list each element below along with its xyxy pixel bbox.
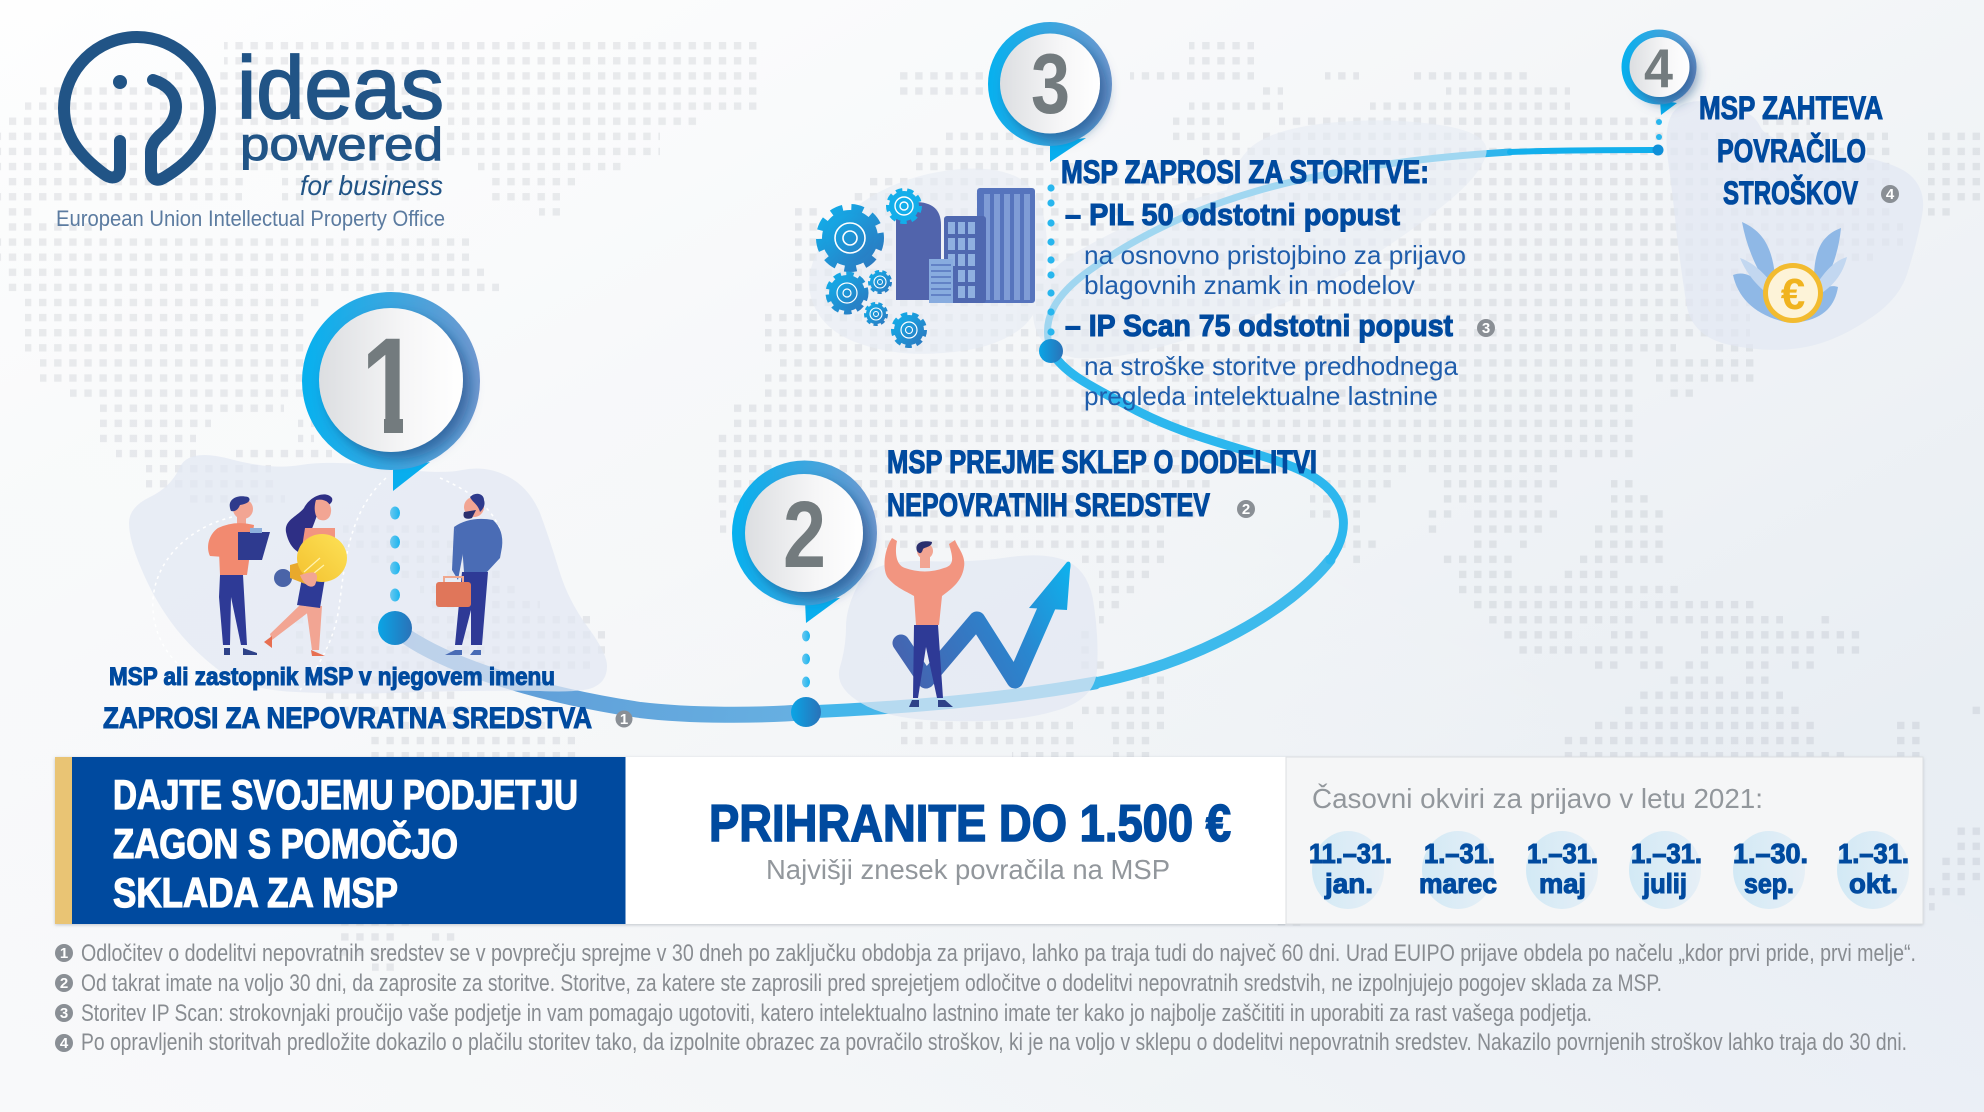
PIL discount: – PIL 50 odstotni popust	[1065, 197, 1400, 232]
logo word: for business: for business	[300, 170, 443, 201]
growth arrow	[901, 562, 1071, 680]
footnote marker 1: 1	[620, 711, 628, 728]
IP Scan discount: – IP Scan 75 odstotni popust	[1065, 308, 1453, 343]
window: September: 1.–30.	[1733, 838, 1808, 869]
step 1 subheading: MSP ali zastopnik MSP v njegovem imenu	[109, 663, 555, 691]
icon: euro coin with leaves: €	[1781, 270, 1805, 319]
footnote marker 3	[1477, 319, 1495, 337]
step 3 heading: MSP ZAPROSI ZA STORITVE:	[1061, 154, 1429, 190]
window: September	[1733, 831, 1808, 909]
figure: woman with light bulb	[264, 494, 347, 656]
window: January: 11.–31.	[1309, 838, 1392, 869]
pin 4 connector dots	[1652, 119, 1664, 156]
panel: savings	[709, 795, 1231, 885]
figure: cheering man with growth arrow	[885, 538, 1071, 707]
IP Scan detail line 2: pregleda intelektualne lastnine	[1084, 381, 1438, 411]
window: March: marec	[1419, 868, 1497, 899]
step 4 text	[1699, 90, 1899, 211]
panel: slogan	[72, 757, 626, 924]
window: March: 1.–31.	[1424, 838, 1495, 869]
journey path	[395, 150, 1658, 715]
buildings	[896, 188, 1035, 303]
pin 4: 4	[1644, 37, 1673, 99]
window: July: julij	[1642, 868, 1687, 899]
window: January: jan.	[1324, 868, 1373, 899]
pin 3	[988, 22, 1112, 162]
window: May: maj	[1539, 868, 1586, 899]
step 2 text	[887, 444, 1317, 523]
accent bar	[55, 757, 72, 924]
figure: man with briefcase	[436, 494, 502, 655]
step 2 heading line 1: MSP PREJME SKLEP O DODELITVI	[887, 444, 1317, 480]
gear: lower left	[829, 275, 865, 311]
banner panel: base	[55, 757, 1923, 924]
logo caption: European Union Intellectual Property Office	[56, 206, 445, 231]
window: March	[1419, 831, 1497, 909]
panel: slogan: DAJTE SVOJEMU PODJETJU	[113, 771, 578, 818]
pin 2 connector dots	[791, 630, 821, 727]
panel: slogan: ZAGON S POMOČJO	[113, 819, 458, 867]
window: May	[1526, 831, 1598, 909]
gear: large	[822, 210, 878, 266]
gear: small right	[870, 272, 890, 292]
footnote 1: 1	[60, 945, 68, 962]
panel: slogan: SKLADA ZA MSP	[113, 869, 398, 916]
step 1 heading: ZAPROSI ZA NEPOVRATNA SREDSTVA	[103, 702, 592, 735]
white dashed arcs behind step 1 figures	[153, 478, 500, 690]
gears and buildings	[822, 188, 1035, 345]
footnote 3: Storitev IP Scan: strokovnjaki proučijo vaše podjetje in vam pomagajo ugotoviti, katero intelektualno lastnino imate ter kako jo najbolje zaščititi in uporabiti za rast vašega podjetja.	[81, 1000, 1592, 1027]
window: October	[1837, 831, 1909, 909]
step 3 text	[1061, 154, 1495, 411]
logo: ideas powered for business	[56, 37, 445, 231]
panel: application windows: Časovni okviri za prijavo v letu 2021:	[1312, 783, 1763, 814]
pin 1: 1	[361, 310, 419, 463]
window: July	[1629, 831, 1702, 909]
window: May: 1.–31.	[1527, 838, 1598, 869]
panel: savings: Najvišji znesek povračila na MSP	[766, 854, 1170, 885]
pin 3 connector dots	[1039, 184, 1063, 363]
window: September: sep.	[1744, 868, 1794, 899]
footnote 3: 3	[60, 1005, 68, 1022]
footnote marker 4	[1881, 185, 1899, 203]
footnote marker 1	[616, 710, 632, 728]
gear: top	[889, 191, 919, 221]
panel: savings: PRIHRANITE DO 1.500 €	[709, 795, 1231, 853]
logo mark	[64, 37, 210, 180]
logo word: powered: powered	[240, 118, 443, 170]
pin 2	[732, 460, 877, 623]
footnotes	[55, 940, 1916, 1056]
step 4 heading line 2: POVRAČILO	[1717, 133, 1866, 169]
footnote 2: 2	[60, 975, 68, 992]
window: July: 1.–31.	[1631, 838, 1702, 869]
bottom banner	[55, 757, 1923, 924]
step 3 backdrop blobs	[809, 120, 1487, 359]
footnote marker 2: 2	[1242, 501, 1250, 518]
figure: man with clipboard	[208, 496, 270, 655]
window: October: 1.–31.	[1838, 838, 1909, 869]
step 4 heading line 3: STROŠKOV	[1723, 175, 1858, 211]
IP Scan detail line 1: na stroške storitve predhodnega	[1084, 351, 1459, 381]
illustration backdrop blobs	[129, 101, 1923, 721]
pin 1 connector dots	[378, 506, 412, 645]
PIL discount detail line 1: na osnovno pristojbino za prijavo	[1084, 240, 1466, 270]
footnote marker 3: 3	[1482, 320, 1490, 337]
step 1 text	[103, 663, 632, 735]
icon: euro coin with leaves	[1733, 222, 1847, 323]
pin 4	[1622, 30, 1696, 115]
window: January	[1309, 831, 1392, 909]
gear: bottom	[894, 315, 924, 345]
logo word: ideas: ideas	[237, 38, 444, 137]
pin 3: 3	[1031, 37, 1070, 132]
panel: application windows	[1286, 757, 1923, 924]
window: October: okt.	[1849, 868, 1898, 899]
step 2 heading line 2: NEPOVRATNIH SREDSTEV	[887, 487, 1211, 523]
pin 2: 2	[783, 482, 826, 588]
pin 1	[302, 292, 480, 491]
footnote 4: 4	[60, 1035, 69, 1052]
man	[885, 538, 964, 707]
PIL discount detail line 2: blagovnih znamk in modelov	[1084, 270, 1415, 300]
gear: small middle	[866, 304, 886, 324]
step 4 heading line 1: MSP ZAHTEVA	[1699, 90, 1883, 126]
footnote marker 2	[1237, 500, 1255, 518]
footnote marker 4: 4	[1886, 186, 1895, 203]
